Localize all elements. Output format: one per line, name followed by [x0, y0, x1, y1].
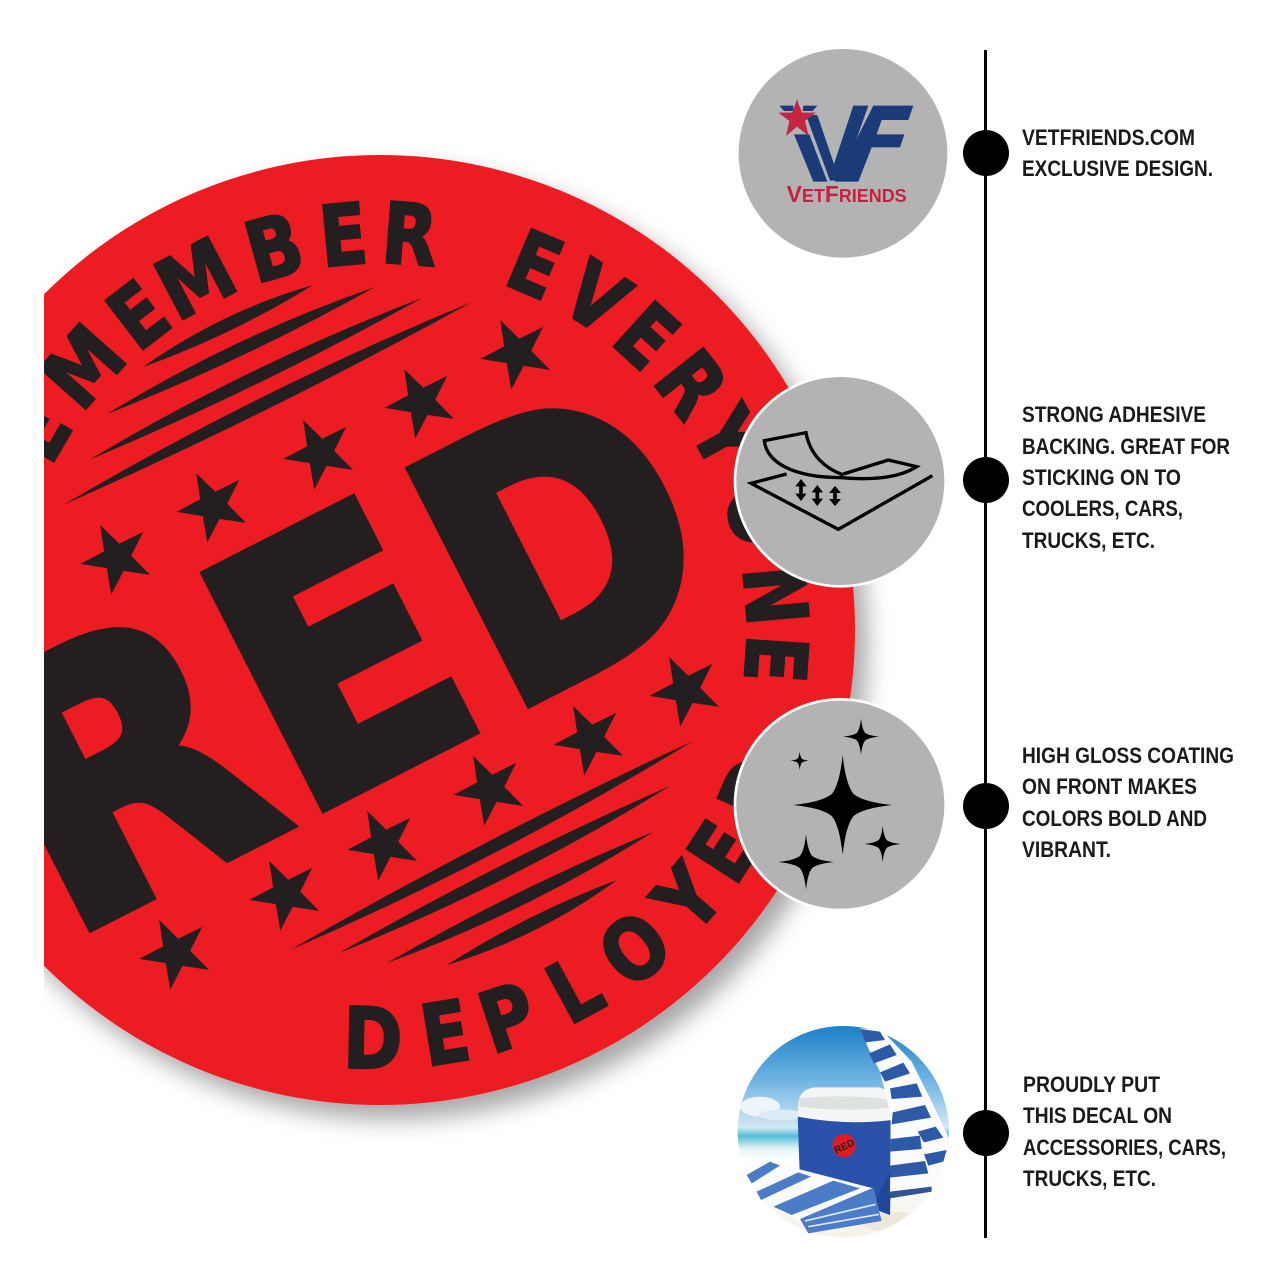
curved text: REMEMBER: R: [379, 186, 441, 286]
curved text: DEPLOYED: O: [582, 894, 690, 1007]
arrows: [801, 483, 835, 502]
curved text: REMEMBER: E: [316, 186, 371, 287]
curved text: EVERYONE: V: [546, 243, 645, 354]
sparkle icons: [778, 719, 901, 890]
text: adhesive: BACKING. GREAT FOR: [1022, 434, 1230, 459]
curved text: DEPLOYED: E: [415, 983, 477, 1087]
text: gloss: ON FRONT MAKES: [1022, 774, 1197, 799]
curved text: EVERYONE: E: [595, 286, 695, 389]
curved text: DEPLOYED: Y: [635, 847, 744, 951]
text: accessories: TRUCKS, ETC.: [1023, 1166, 1156, 1191]
cooler: RED: [833, 1137, 857, 1157]
text: adhesive: [1022, 402, 1230, 553]
badge: VetFriends logo: [739, 49, 947, 258]
sticker: red circular decal: [0, 155, 855, 1105]
curved text: DEPLOYED: L: [533, 937, 619, 1044]
curved text: EVERYONE: N: [723, 562, 824, 630]
text: adhesive: TRUCKS, ETC.: [1022, 528, 1155, 553]
text: accessories: ACCESSORIES, CARS,: [1023, 1135, 1226, 1160]
text: adhesive: STICKING ON TO: [1022, 465, 1181, 490]
timeline dots: [963, 130, 1009, 1156]
lower slashes: [290, 741, 693, 965]
folded towel: [747, 1162, 882, 1233]
curved text: EVERYONE: O: [703, 471, 813, 558]
curved text: REMEMBER: B: [235, 195, 314, 303]
curved text: DEPLOYED: D: [701, 744, 814, 836]
curved text: DEPLOYED: P: [468, 965, 548, 1074]
big word RED: E: [151, 428, 531, 893]
curved text: EVERYONE: [506, 228, 810, 680]
upper stars: [80, 320, 550, 594]
hanging towel: [860, 1028, 949, 1198]
red star: [778, 99, 816, 136]
lower stars: [128, 641, 731, 996]
upper slashes: [63, 285, 472, 505]
text: exclusive design: VETFRIENDS.COM: [1022, 125, 1195, 150]
badge: high gloss sparkles: [735, 699, 946, 910]
badge: beach cooler photo: [735, 1025, 952, 1238]
text: accessories: PROUDLY PUT: [1023, 1072, 1160, 1097]
big word RED: D: [357, 306, 770, 788]
curved text: DEPLOYED: D: [342, 991, 403, 1089]
curved text: EVERYONE: R: [635, 334, 745, 437]
text: accessories: THIS DECAL ON: [1023, 1103, 1172, 1128]
curved text: REMEMBER: E: [91, 264, 188, 370]
text: gloss: COLORS BOLD AND: [1022, 806, 1207, 831]
text: gloss: [1022, 743, 1234, 862]
text: exclusive design: [1022, 125, 1213, 181]
mini sticker: [832, 1134, 856, 1157]
curved text: REMEMBER: [44, 200, 436, 463]
curved text: DEPLOYED: [348, 762, 752, 1070]
text: accessories: [1023, 1072, 1226, 1191]
text: gloss: HIGH GLOSS COATING: [1022, 743, 1234, 768]
curved text: REMEMBER: M: [23, 307, 145, 427]
VF logo mark: [779, 106, 913, 182]
text: exclusive design: EXCLUSIVE DESIGN.: [1022, 156, 1213, 181]
curved text: REMEMBER: M: [141, 219, 251, 340]
curved text: EVERYONE: Y: [670, 392, 781, 486]
curved text: EVERYONE: E: [494, 213, 575, 321]
text: gloss: VIBRANT.: [1022, 837, 1111, 862]
big word RED: [44, 408, 684, 934]
timeline line: [984, 50, 987, 1238]
VetFriends wordmark: VETFRIENDS: [787, 181, 907, 207]
curved text: DEPLOYED: E: [671, 807, 778, 899]
peel icon: [751, 433, 932, 529]
beach background: [735, 1025, 952, 1238]
badge: adhesive backing: [735, 376, 946, 586]
curved text: EVERYONE: E: [724, 632, 824, 686]
text: adhesive: COOLERS, CARS,: [1022, 496, 1183, 521]
cooler: [798, 1087, 893, 1215]
text: adhesive: STRONG ADHESIVE: [1022, 402, 1206, 427]
